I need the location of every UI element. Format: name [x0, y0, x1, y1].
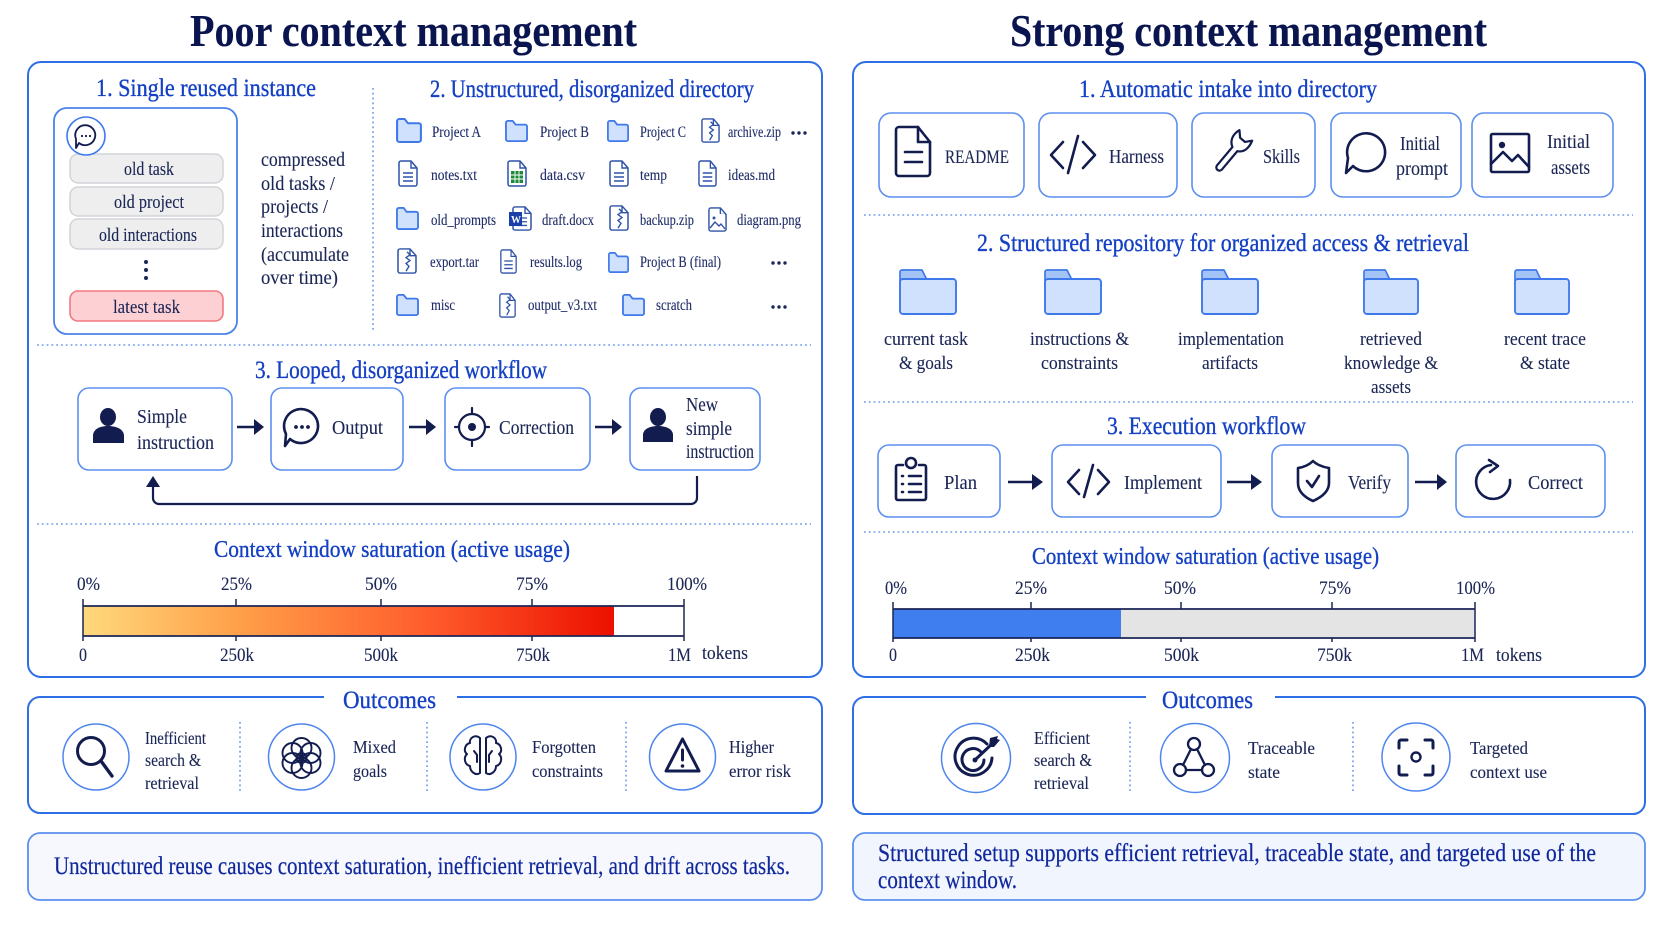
- more dots row 5: [771, 305, 787, 309]
- title: strong context management: Strong context management: [1010, 5, 1488, 56]
- card: README: [879, 113, 1024, 197]
- card: Implement: [1052, 445, 1221, 517]
- chart: saturation bar low: tokens: [1496, 646, 1542, 666]
- arrow: feedback loop: [146, 476, 697, 504]
- card: Harness: [1039, 113, 1177, 197]
- chart: saturation bar low: 50%: [1164, 579, 1196, 599]
- old task pill: old task: [124, 160, 175, 180]
- export.tar: export.tar: [430, 254, 480, 271]
- outcome: targeted context use: context use: [1470, 762, 1547, 782]
- card: new simple instruction: instruction: [686, 441, 754, 463]
- arrow: [1008, 474, 1043, 490]
- instance box: [54, 108, 237, 334]
- temp: temp: [640, 167, 667, 184]
- outcome: forgotten constraints: constraints: [532, 761, 603, 781]
- chart: saturation bar low: 1M: [1461, 646, 1484, 666]
- card: Skills: [1192, 113, 1315, 197]
- panel: strong context main: [853, 62, 1645, 677]
- outcome: inefficient search: [63, 724, 206, 793]
- old project pill: [70, 187, 223, 216]
- outcome: traceable state: [1160, 724, 1315, 792]
- misc: misc: [431, 297, 455, 314]
- outcome: targeted context use: [1382, 723, 1547, 791]
- chart: saturation bar high: 1M: [668, 646, 691, 666]
- folder: current task and goals: & goals: [899, 354, 953, 374]
- folder: retrieved knowledge and assets: assets: [1371, 378, 1411, 398]
- output_v3.txt: [500, 294, 598, 317]
- scratch: [623, 295, 692, 315]
- chart: saturation bar low: 500k: [1164, 646, 1200, 666]
- Project B (final): Project B (final): [640, 254, 721, 271]
- folder: instructions and constraints: [1030, 270, 1130, 374]
- chart: saturation bar high: [77, 575, 748, 666]
- callout: poor summary: [28, 833, 822, 900]
- more dots row 4: [771, 261, 787, 265]
- card: simple instruction: [78, 388, 232, 470]
- chart: saturation bar high: 25%: [221, 575, 252, 595]
- data.csv: data.csv: [540, 167, 585, 184]
- chart: saturation bar high: 75%: [516, 575, 548, 595]
- panel: strong outcomes: [853, 685, 1645, 814]
- panel: poor context main: [28, 62, 822, 677]
- chart: saturation bar high: 750k: [516, 646, 551, 666]
- note: compressed tasks: [261, 150, 349, 289]
- outcome: traceable state: state: [1248, 762, 1280, 782]
- note: compressed tasks: (accumulate: [261, 245, 349, 266]
- latest task pill: latest task: [113, 298, 181, 318]
- misc: [397, 295, 455, 315]
- results.log: results.log: [530, 254, 582, 271]
- folder: recent trace and state: recent trace: [1504, 330, 1586, 350]
- card: Plan: Plan: [944, 472, 977, 494]
- callout: poor summary: Unstructured reuse causes context saturation, inefficient retrieval, and drift across tasks.: [54, 853, 790, 880]
- folder: current task and goals: current task: [884, 330, 969, 350]
- folder: instructions and constraints: constraints: [1041, 354, 1118, 374]
- card: Initial prompt: [1331, 113, 1461, 197]
- note: compressed tasks: old tasks /: [261, 174, 336, 195]
- folder: retrieved knowledge and assets: knowledge &: [1344, 354, 1439, 374]
- notes.txt: [399, 161, 478, 186]
- heading: context window saturation: Context window saturation (active usage): [1032, 544, 1379, 570]
- outcome: mixed goals: [268, 724, 396, 790]
- card: Initial assets: assets: [1551, 157, 1590, 179]
- outcome: inefficient search: search &: [145, 750, 201, 770]
- outcome: efficient search: [942, 724, 1092, 793]
- backup.zip: backup.zip: [640, 212, 694, 229]
- heading: structured repository: 2. Structured repository for organized access & retrieval: [977, 228, 1469, 257]
- folder: implementation artifacts: [1178, 270, 1284, 374]
- card: simple instruction: instruction: [137, 432, 214, 454]
- outcome: forgotten constraints: [450, 724, 603, 790]
- scratch: scratch: [656, 297, 692, 314]
- folder: recent trace and state: [1504, 270, 1586, 374]
- chart: saturation bar high: tokens: [702, 644, 748, 664]
- ideas.md: ideas.md: [728, 167, 775, 184]
- card: Plan: [878, 445, 1000, 517]
- chart: saturation bar low: 0%: [885, 579, 907, 599]
- arrow: [409, 419, 436, 435]
- chart: saturation bar high: 250k: [220, 646, 255, 666]
- outcome: traceable state: Traceable: [1248, 738, 1315, 758]
- chart: saturation bar high: 500k: [364, 646, 399, 666]
- card: new simple instruction: New: [686, 394, 718, 416]
- chart: saturation bar low: 750k: [1317, 646, 1353, 666]
- diagram.png: [709, 208, 801, 231]
- heading: outcomes: Outcomes: [1162, 685, 1253, 714]
- heading: looped workflow: 3. Looped, disorganized workflow: [255, 355, 547, 384]
- Project C: [608, 121, 686, 141]
- draft.docx: W: [511, 215, 521, 226]
- chart: saturation bar low: 250k: [1015, 646, 1051, 666]
- outcome: higher error risk: Higher: [729, 737, 774, 757]
- card: Verify: [1272, 445, 1408, 517]
- card: Initial prompt: prompt: [1396, 158, 1448, 180]
- draft.docx: draft.docx: [542, 212, 594, 229]
- export.tar: [398, 249, 480, 273]
- note: compressed tasks: compressed: [261, 150, 345, 171]
- old interactions pill: [70, 219, 223, 249]
- card: output: Output: [332, 417, 383, 439]
- data.csv: [508, 161, 585, 186]
- notes.txt: notes.txt: [431, 167, 478, 184]
- Project B (final): [609, 253, 721, 272]
- card: Skills: Skills: [1263, 146, 1300, 168]
- folder: implementation artifacts: artifacts: [1202, 354, 1258, 374]
- outcome: efficient search: retrieval: [1034, 773, 1089, 793]
- card: new simple instruction: simple: [686, 418, 732, 440]
- card: Initial assets: [1472, 113, 1613, 197]
- chart: saturation bar low: 25%: [1015, 579, 1047, 599]
- file list: disorganized directory: [397, 119, 807, 317]
- outcome: inefficient search: Inefficient: [145, 728, 206, 748]
- folder: retrieved knowledge and assets: retrieved: [1360, 330, 1423, 350]
- backup.zip: [610, 206, 694, 230]
- ideas.md: [699, 161, 775, 186]
- card: Correct: Correct: [1528, 472, 1583, 494]
- results.log: [501, 250, 582, 273]
- arrow: [595, 419, 622, 435]
- outcome: targeted context use: Targeted: [1470, 738, 1528, 758]
- outcome: mixed goals: goals: [353, 761, 387, 781]
- chart: saturation bar high: 100%: [667, 575, 707, 595]
- archive.zip: [702, 119, 781, 142]
- draft.docx: [509, 207, 594, 230]
- Project B: Project B: [540, 124, 589, 141]
- callout: strong summary: [853, 833, 1645, 900]
- chart: saturation bar low: 100%: [1456, 579, 1495, 599]
- title: poor context management: Poor context management: [190, 5, 638, 56]
- ellipsis dots: [144, 260, 148, 280]
- heading: context window saturation: Context window saturation (active usage): [214, 537, 570, 563]
- old_prompts: [397, 208, 496, 229]
- panel: poor outcomes: [28, 685, 822, 813]
- card: README: README: [945, 148, 1009, 168]
- arrow: [237, 419, 264, 435]
- chart: saturation bar high: 50%: [365, 575, 397, 595]
- note: compressed tasks: over time): [261, 268, 338, 289]
- old interactions pill: old interactions: [99, 226, 197, 246]
- chart: saturation bar high: 0: [79, 646, 87, 666]
- note: compressed tasks: projects /: [261, 197, 329, 218]
- old project pill: old project: [114, 193, 185, 213]
- diagram.png: diagram.png: [737, 212, 801, 229]
- Project A: [397, 119, 482, 142]
- card: new simple instruction: [630, 388, 760, 470]
- outcome: forgotten constraints: Forgotten: [532, 737, 596, 757]
- card: Initial prompt: Initial: [1400, 133, 1440, 155]
- icon: chat circle: [67, 117, 105, 155]
- folder: recent trace and state: & state: [1520, 354, 1570, 374]
- outcome: mixed goals: Mixed: [353, 737, 396, 757]
- outcome: efficient search: search &: [1034, 750, 1092, 770]
- heading: outcomes: Outcomes: [343, 685, 436, 714]
- arrow: [1415, 474, 1447, 490]
- arrow: [1227, 474, 1262, 490]
- temp: [610, 161, 667, 186]
- card: Verify: Verify: [1348, 472, 1392, 494]
- old_prompts: old_prompts: [431, 212, 496, 229]
- chart: saturation bar low: 75%: [1319, 579, 1351, 599]
- card: Initial assets: Initial: [1547, 131, 1590, 153]
- more dots row 1: [791, 131, 807, 135]
- chart: saturation bar low: 0: [889, 646, 897, 666]
- latest task pill: [70, 291, 223, 321]
- card: correction: Correction: [499, 417, 574, 439]
- heading: automatic intake: 1. Automatic intake into directory: [1079, 74, 1377, 103]
- chart: saturation bar high: 0%: [77, 575, 100, 595]
- card: simple instruction: Simple: [137, 406, 187, 428]
- Project B: [506, 121, 589, 141]
- outcome: inefficient search: retrieval: [145, 773, 199, 793]
- outcome: higher error risk: [650, 724, 791, 790]
- card: Correct: [1456, 445, 1605, 517]
- card: Implement: Implement: [1124, 472, 1202, 494]
- Project C: Project C: [640, 124, 686, 141]
- outcome: efficient search: Efficient: [1034, 728, 1090, 748]
- callout: strong summary: context window.: [878, 867, 1017, 894]
- folder: retrieved knowledge and assets: [1344, 270, 1439, 398]
- folder: instructions and constraints: instructions &: [1030, 330, 1130, 350]
- card: Harness: Harness: [1109, 146, 1164, 168]
- outcome: higher error risk: error risk: [729, 761, 791, 781]
- note: compressed tasks: interactions: [261, 221, 343, 242]
- card: output: [271, 388, 403, 470]
- heading: single reused instance: 1. Single reused instance: [96, 73, 316, 102]
- output_v3.txt: output_v3.txt: [528, 297, 598, 314]
- heading: unstructured directory: 2. Unstructured, disorganized directory: [430, 74, 754, 103]
- folder: implementation artifacts: implementation: [1178, 330, 1284, 350]
- Project A: Project A: [432, 124, 482, 141]
- archive.zip: archive.zip: [728, 124, 781, 141]
- folder: current task and goals: [884, 270, 969, 374]
- chart: saturation bar low: [885, 579, 1542, 666]
- heading: execution workflow: 3. Execution workflow: [1107, 411, 1306, 440]
- old task pill: [70, 154, 223, 183]
- card: correction: [445, 388, 590, 470]
